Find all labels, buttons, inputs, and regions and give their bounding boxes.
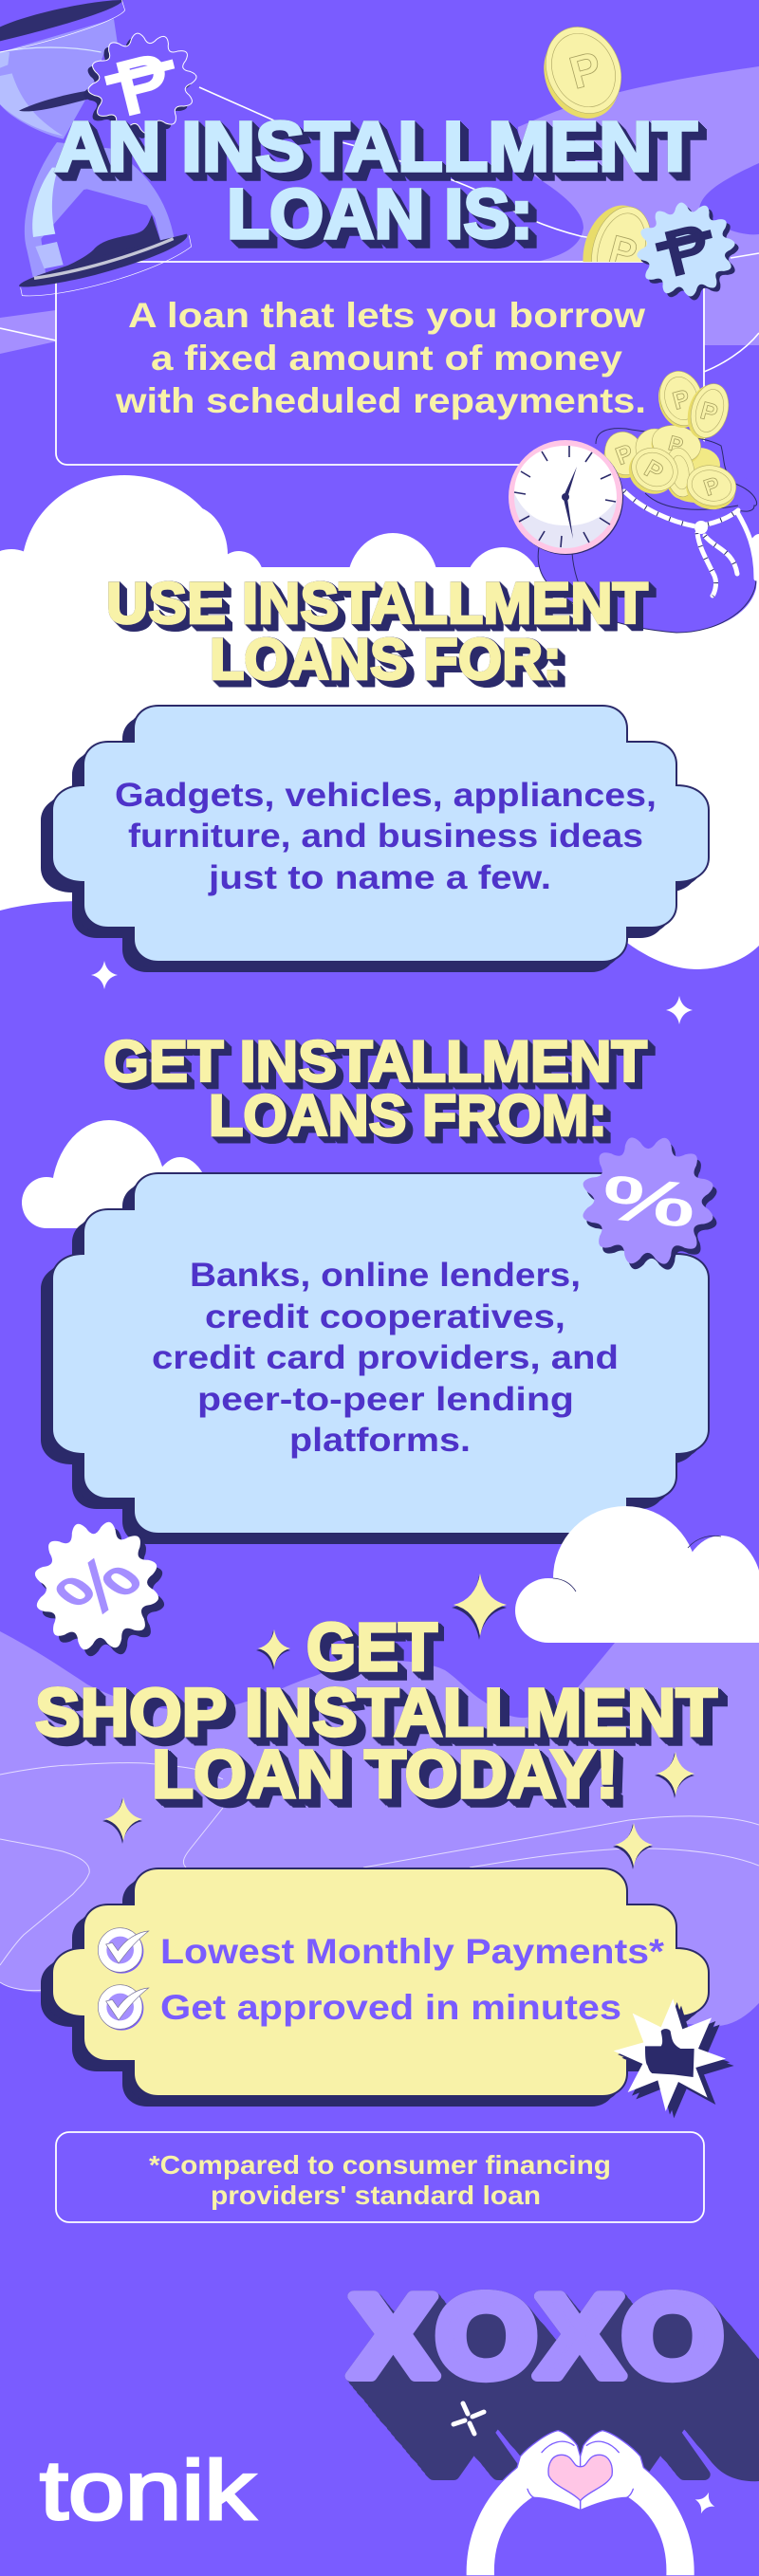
footnote box: providers' standard loan <box>211 2180 541 2210</box>
icon: thumbs up burst <box>614 1998 734 2118</box>
title: an installment loan is <box>54 107 697 253</box>
panel: lenders: peer-to-peer lending <box>197 1381 574 1418</box>
icon: percent badge light: % <box>599 1162 699 1242</box>
panel: lenders <box>41 1173 709 1544</box>
panel: uses: just to name a few. <box>208 859 551 896</box>
icon: hourglass <box>0 0 192 296</box>
heading: use installment loans for <box>106 571 648 691</box>
icon: check one <box>98 1928 149 1974</box>
icon: top coin <box>528 14 637 131</box>
icon: coin pile: P <box>639 453 668 487</box>
icon: peso badge light blue <box>627 193 749 310</box>
panel: benefits: Lowest Monthly Payments* <box>160 1932 665 1971</box>
heading: get shop installment loan today: LOAN TODAY! <box>152 1738 619 1812</box>
icon: peso badge light blue: P <box>657 209 718 291</box>
panel: uses: Gadgets, vehicles, appliances, <box>115 777 657 814</box>
panel: uses: furniture, and business ideas <box>128 818 643 855</box>
title: an installment loan is: LOAN IS: <box>227 175 533 253</box>
definition text: A loan that lets you borrow <box>128 296 645 335</box>
clouds: white section background <box>0 475 759 984</box>
heading: use installment loans for: LOANS FOR: <box>210 627 562 691</box>
icon: clock <box>509 440 623 555</box>
panel: lenders: credit card providers, and <box>152 1339 619 1376</box>
title: an installment loan is: AN INSTALLMENT <box>54 107 697 186</box>
heading: get shop installment loan today <box>35 1610 717 1812</box>
heading: get installment loans from: GET INSTALLMENT <box>103 1029 647 1094</box>
heading: get installment loans from <box>103 1029 647 1148</box>
panel: lenders: Banks, online lenders, <box>190 1257 581 1294</box>
sparkles white <box>91 961 693 1024</box>
icon: sparkle bars <box>454 2403 484 2434</box>
icon: percent badge white <box>30 1518 169 1661</box>
cloud: left <box>22 1120 202 1228</box>
panel: lenders: credit cooperatives, <box>205 1298 565 1335</box>
icon: heart hands <box>453 2431 705 2576</box>
icon: money bag <box>538 429 757 633</box>
thin white connecting lines <box>0 87 759 372</box>
lower light purple wave <box>0 1631 759 2026</box>
sparkles yellow <box>102 1573 694 1869</box>
purple wave under section 2 <box>0 901 759 1062</box>
icon: falling coins: P <box>697 396 721 428</box>
panel: definition box <box>56 262 704 465</box>
icon: coin pile: P <box>701 472 723 502</box>
icon: coin pile <box>597 420 740 514</box>
panel: lenders: platforms. <box>289 1422 471 1459</box>
icon: coin pile: P <box>612 438 637 470</box>
cloud: right <box>515 1506 759 1655</box>
definition text: a fixed amount of money <box>151 339 622 377</box>
footnote box <box>56 2132 704 2222</box>
tonik logo: tonik <box>40 2443 256 2537</box>
icon: coin behind title: P <box>604 227 641 276</box>
definition text: with scheduled repayments. <box>115 381 646 420</box>
footnote box: *Compared to consumer financing <box>149 2150 611 2180</box>
panel: benefits: Get approved in minutes <box>160 1988 621 2027</box>
thin lines on light wave <box>0 1763 759 1991</box>
heading: get installment loans from: LOANS FROM: <box>209 1083 607 1148</box>
icon: check two <box>98 1985 149 2031</box>
icon: peso badge purple <box>73 22 207 150</box>
panel: uses <box>41 706 709 972</box>
heading: get shop installment loan today: SHOP INSTALLMENT <box>35 1676 717 1751</box>
top light purple waves <box>0 66 759 354</box>
icon: coin pile: P <box>666 431 686 457</box>
heading: get shop installment loan today: GET <box>306 1610 437 1685</box>
icon: small white star <box>692 2489 718 2517</box>
heading: use installment loans for: USE INSTALLMENT <box>106 571 648 635</box>
icon: falling coins <box>652 366 734 444</box>
icon: percent badge white: % <box>37 1541 160 1632</box>
icon: top coin: P <box>565 43 607 100</box>
icon: percent badge light <box>573 1128 727 1279</box>
icon: falling coins: P <box>670 383 693 415</box>
panel: benefits <box>41 1868 709 2107</box>
icon: coin behind title <box>583 205 651 262</box>
definition text <box>115 296 646 420</box>
icon: peso badge purple: P <box>107 34 180 134</box>
xoxo text: XOXO <box>350 2272 723 2401</box>
